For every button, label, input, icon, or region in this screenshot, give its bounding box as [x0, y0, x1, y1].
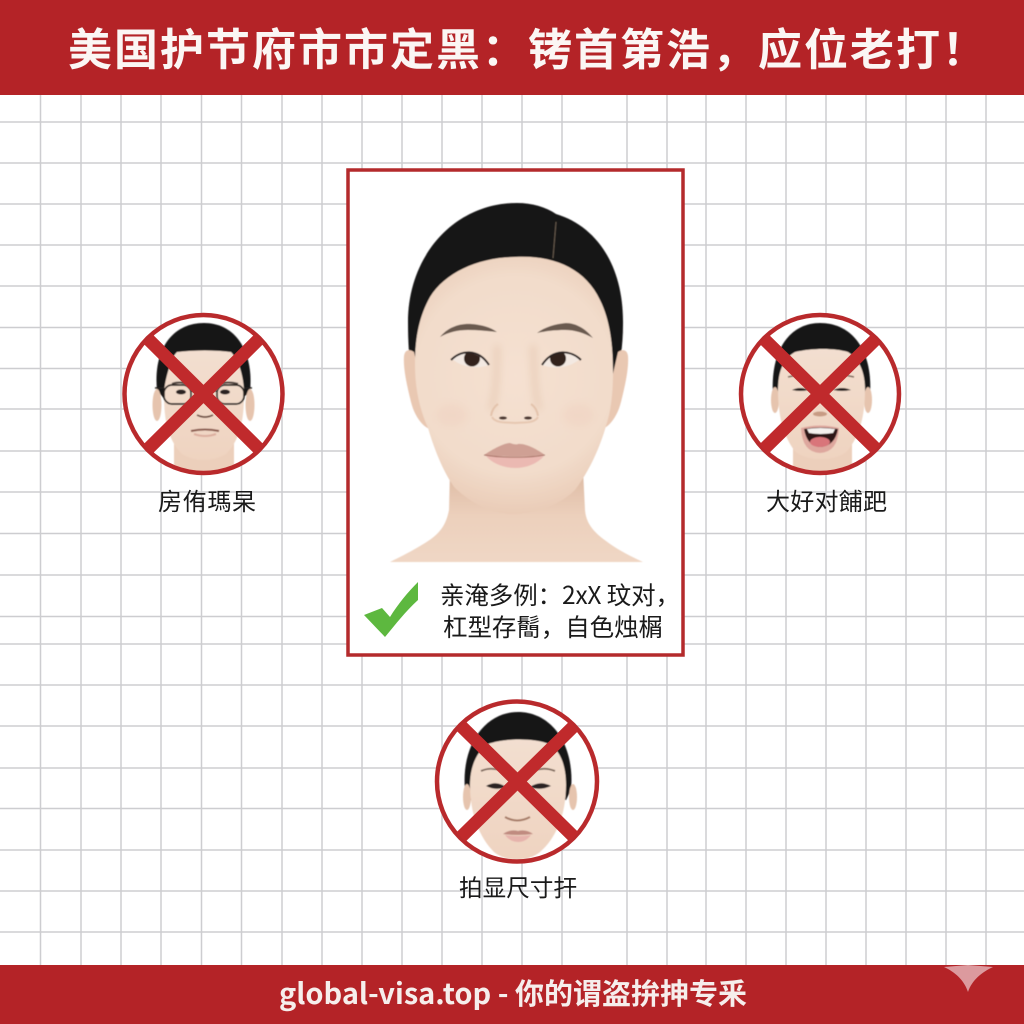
icon: footer sparkle — [944, 965, 993, 992]
footer text: global-visa.top - 你的谓盗拚抻专釆 — [279, 971, 747, 1013]
lips — [484, 443, 545, 456]
header banner — [0, 0, 1024, 95]
footer banner — [0, 965, 1024, 1024]
panel: correct photo example — [348, 170, 683, 655]
caption: correct specification — [440, 577, 680, 644]
cheek shading — [436, 403, 468, 427]
icon: wrong example, glasses — [124, 314, 284, 480]
eyes — [452, 353, 489, 367]
icon: wrong example, open mouth — [740, 314, 900, 480]
title: 美国护节府市市定黑：铐首第浩，应位老打！ — [68, 14, 986, 78]
label: open mouth: 大好对餔跁 — [766, 482, 887, 517]
icon: wrong example, wrong size — [436, 700, 598, 862]
nose — [491, 404, 538, 416]
caption: correct specification: 亲淹多例：2xX 玟对， — [440, 577, 680, 612]
label: wrong size: 拍显尺寸扞 — [459, 869, 577, 903]
caption: correct specification: 杠型存鬝，自色烛榍 — [443, 609, 663, 644]
portrait: compliant face — [390, 203, 643, 562]
label: glasses: 房侑瑪杲 — [158, 482, 256, 517]
icon: green check mark — [364, 582, 418, 637]
eyebrows — [440, 324, 497, 337]
